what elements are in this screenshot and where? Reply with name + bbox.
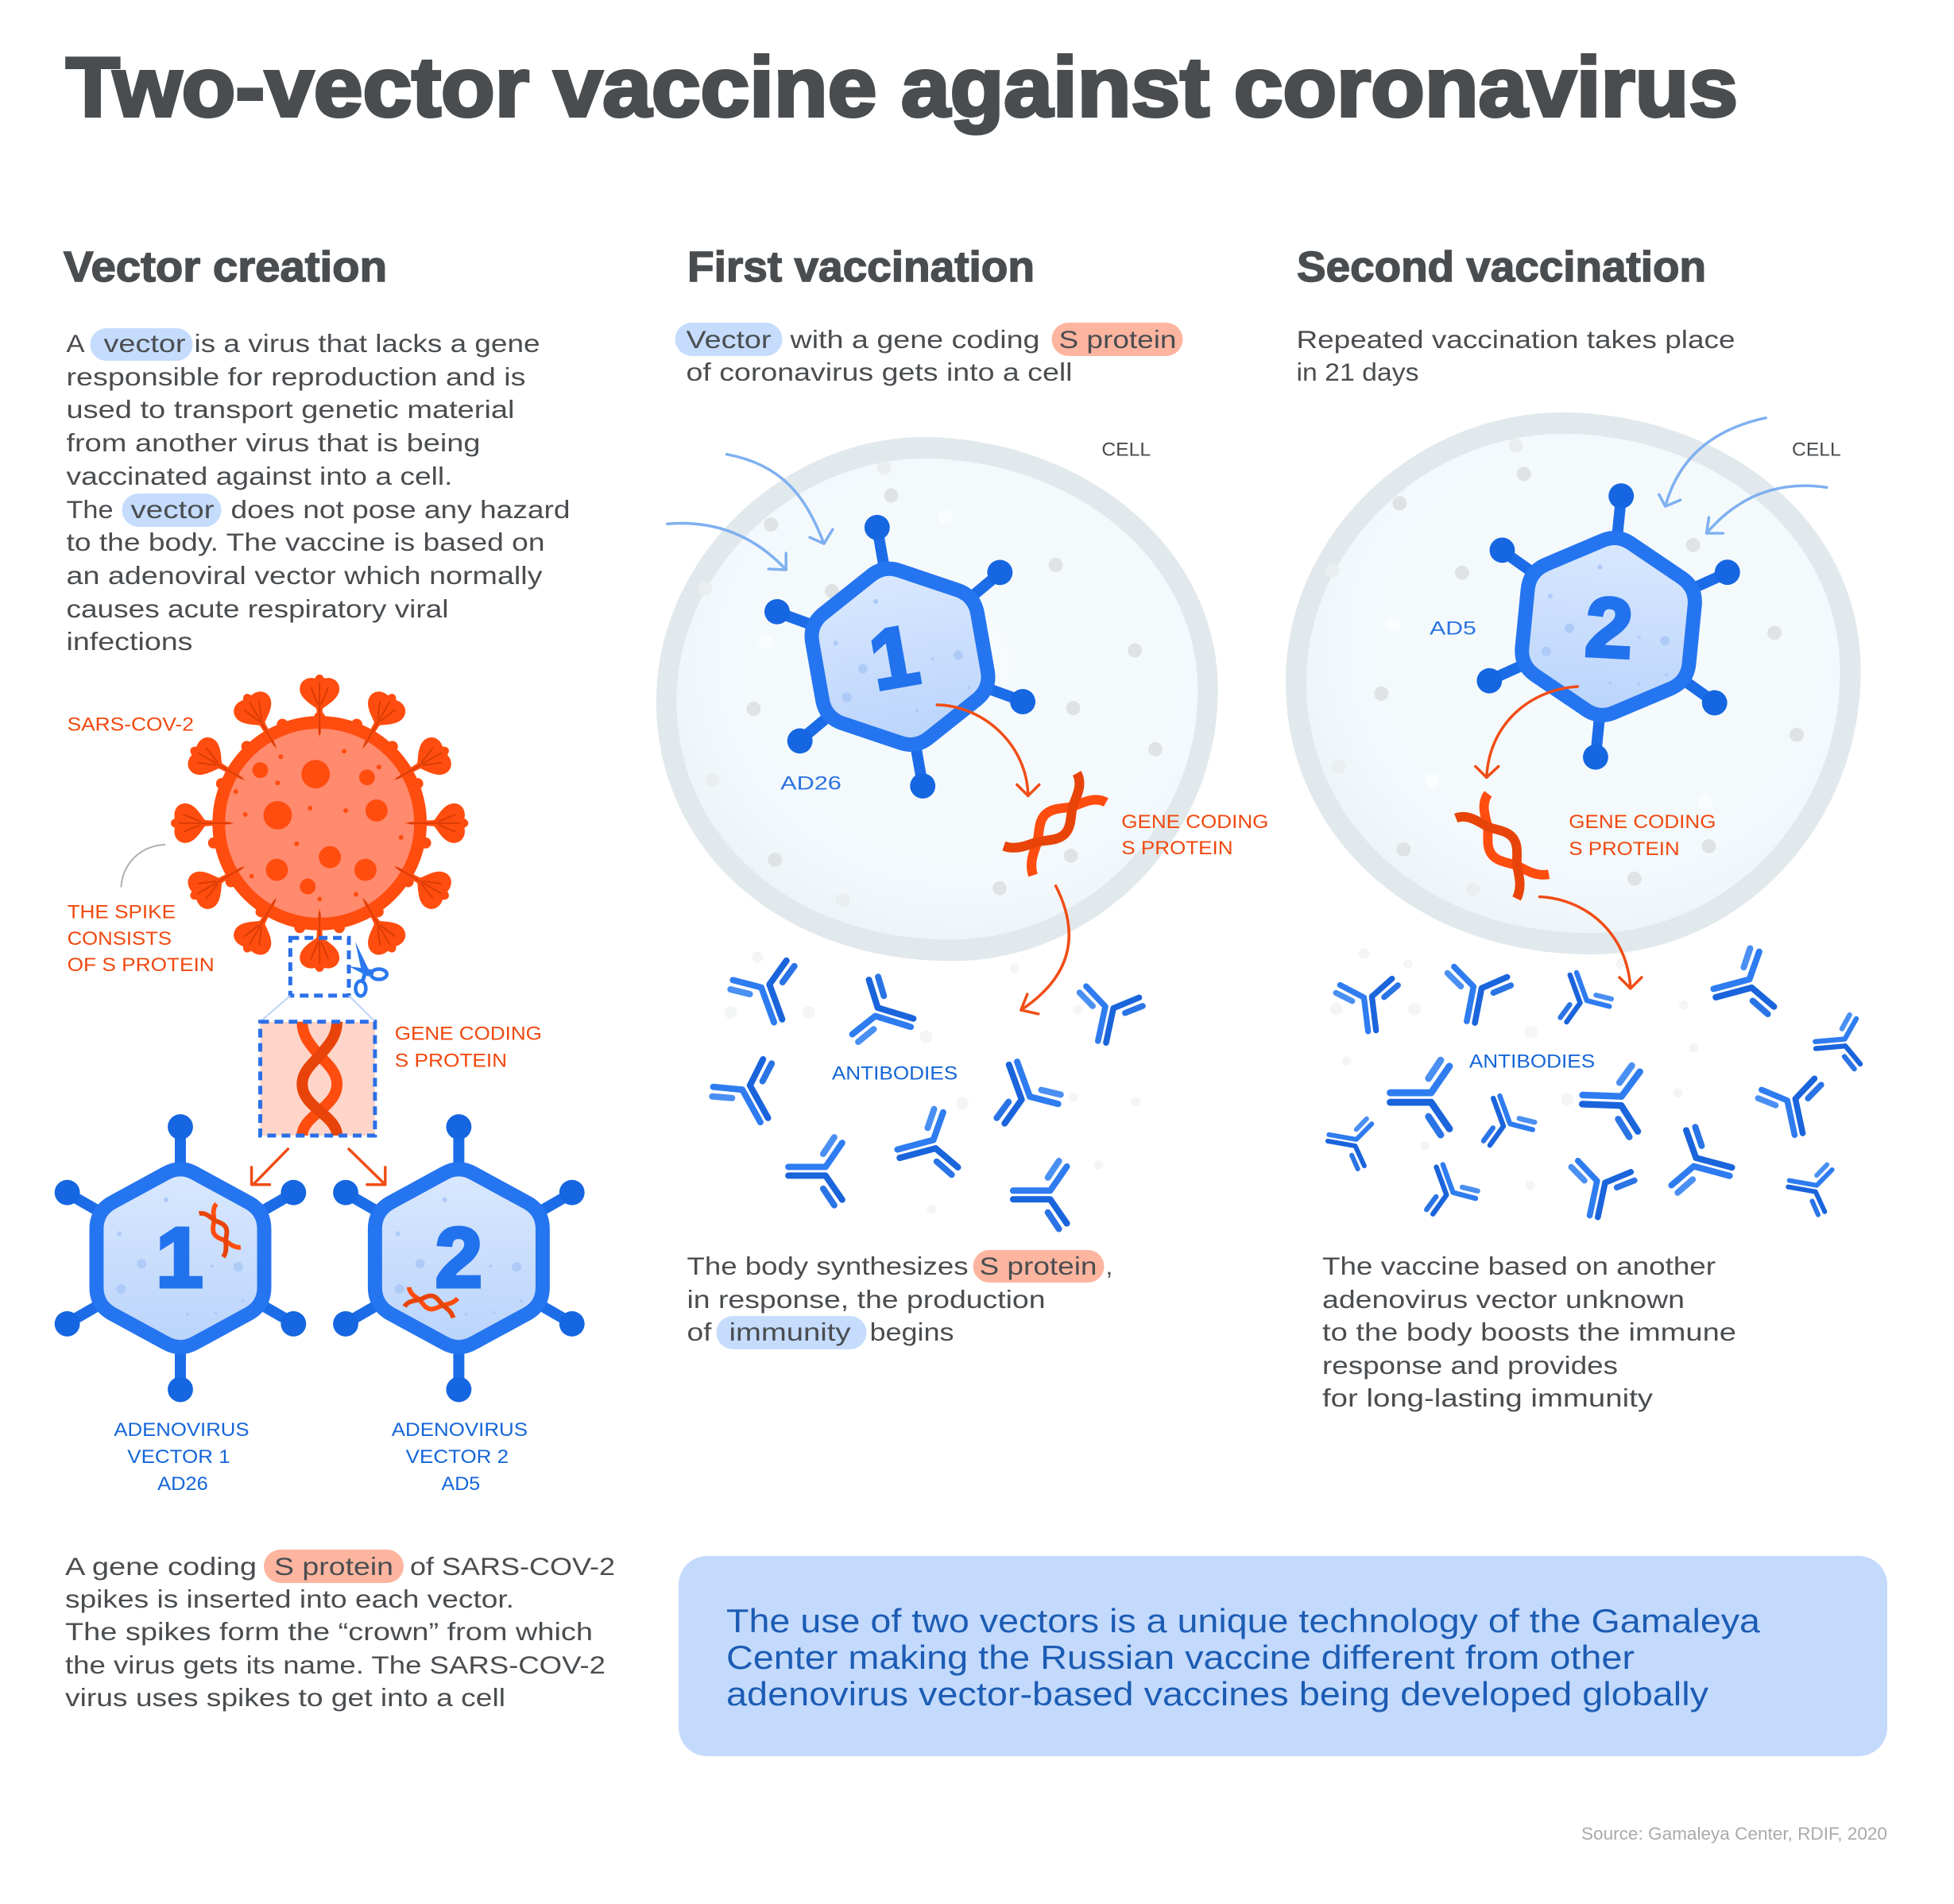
text block: vector definition: vaccinated against into a cell. xyxy=(67,462,453,490)
icon: SARS-COV-2 virus xyxy=(171,675,468,972)
arrow: vector to gene xyxy=(937,705,1039,795)
text block: S protein gene xyxy=(65,1550,615,1712)
text block: S protein gene: S protein xyxy=(274,1552,393,1581)
label: antibodies, second vaccination: ANTIBODIES xyxy=(1469,1051,1595,1072)
label: gene coding S protein: GENE CODING xyxy=(395,1024,542,1045)
panel: second vaccination cell xyxy=(1286,412,1861,954)
icon: DNA in first cell xyxy=(1004,773,1106,875)
text block: body response: of xyxy=(687,1318,712,1346)
label: adenovirus vector 1 AD26 xyxy=(114,1419,250,1495)
label: gene coding S protein, second cell: S PROTEIN xyxy=(1569,838,1680,860)
text block: second vaccination intro: Repeated vaccination takes place xyxy=(1297,325,1735,354)
text block: vector definition: responsible for reproduction and is xyxy=(67,362,526,391)
text block: S protein gene: virus uses spikes to get into a cell xyxy=(65,1683,505,1712)
text block: first vaccination intro xyxy=(675,323,1182,386)
label: adenovirus vector 2 AD5: VECTOR 2 xyxy=(406,1446,509,1468)
arrow: gene to antibodies xyxy=(1021,886,1069,1014)
text block: vector definition: from another virus that is being xyxy=(67,428,480,457)
text block: vector definition: infections xyxy=(67,627,192,656)
callout: The use of two vectors is a unique technology of the Gamaleya xyxy=(726,1602,1761,1639)
text block: vector definition: used to transport genetic material xyxy=(67,395,515,424)
icon: adenovirus vector 2 xyxy=(333,1114,585,1402)
panel: first vaccination diagram xyxy=(656,437,1268,1229)
callout xyxy=(679,1556,1887,1756)
callout: Center making the Russian vaccine different from other xyxy=(726,1639,1635,1676)
text block: S protein gene: spikes is inserted into each vector. xyxy=(65,1585,514,1613)
text block: first vaccination intro: with a gene coding xyxy=(789,325,1039,354)
arrow: vector entering cell, upper xyxy=(726,455,833,544)
icon: vector 1 in cell xyxy=(751,493,1049,820)
text block: first vaccination intro: of coronavirus gets into a cell xyxy=(687,358,1073,386)
text block: second vaccination result: The vaccine based on another xyxy=(1322,1252,1716,1280)
panel: vector creation diagram xyxy=(55,675,585,1495)
label: gene coding S protein, second cell: GENE CODING xyxy=(1569,811,1716,833)
label: gene coding S protein, first cell xyxy=(1121,811,1268,859)
callout: adenovirus vector-based vaccines being developed globally xyxy=(726,1675,1708,1712)
arrow: vector 2 to gene xyxy=(1476,687,1577,777)
icon: vector 2 in cell xyxy=(1469,471,1747,782)
text block: vector definition: causes acute respiratory viral xyxy=(67,594,448,623)
text block: first vaccination intro: S protein xyxy=(1058,325,1176,354)
text block: second vaccination result: response and provides xyxy=(1322,1351,1618,1380)
text block: vector definition: The xyxy=(67,495,113,524)
label: adenovirus vector 2 AD5 xyxy=(392,1419,528,1495)
text block: vector definition: is a virus that lacks a gene xyxy=(194,329,540,358)
title: Two-vector vaccine against coronavirus xyxy=(66,41,1738,134)
panel: second vaccination diagram xyxy=(1286,412,1861,1223)
heading: second vaccination: Second vaccination xyxy=(1297,243,1706,291)
dashed selection box on spike xyxy=(290,938,349,996)
source note: Source: Gamaleya Center, RDIF, 2020 xyxy=(1581,1824,1887,1844)
label: adenovirus vector 1 AD26: ADENOVIRUS xyxy=(114,1419,250,1441)
label: AD5: AD5 xyxy=(1430,617,1476,639)
text block: vector definition: does not pose any hazard xyxy=(230,495,571,524)
text block: first vaccination intro: Vector xyxy=(687,325,771,354)
callout line: spike xyxy=(121,845,165,888)
text block: S protein gene: the virus gets its name. The SARS-COV-2 xyxy=(65,1651,606,1679)
label: the spike consists of S protein xyxy=(68,901,215,976)
text block: vector definition: vector xyxy=(103,329,186,358)
text block: body response: S protein xyxy=(979,1252,1097,1280)
text block: body response: in response, the production xyxy=(687,1285,1046,1314)
panel: first vaccination cell xyxy=(656,437,1218,961)
zoom connector lines xyxy=(261,996,375,1022)
icon: scissors xyxy=(349,942,387,996)
icon: adenovirus vector 1 xyxy=(55,1114,306,1402)
label: adenovirus vector 2 AD5: AD5 xyxy=(441,1473,480,1495)
icon: adenovirus vector 1: 1 xyxy=(157,1211,203,1305)
text block: vector definition: vector xyxy=(130,495,215,524)
text block: second vaccination result xyxy=(1322,1252,1736,1412)
label: gene coding S protein: S PROTEIN xyxy=(395,1050,507,1071)
label: AD26: AD26 xyxy=(780,772,842,794)
faint dots: second vaccination antibodies xyxy=(1330,948,1699,1190)
text block: second vaccination intro: in 21 days xyxy=(1297,358,1419,386)
text block: second vaccination result: for long-lasting immunity xyxy=(1322,1383,1653,1412)
text block: vector definition: A xyxy=(67,329,84,358)
text block: body response: immunity xyxy=(729,1318,851,1346)
icon: vector 1 in cell: 1 xyxy=(863,609,925,708)
text block: second vaccination intro xyxy=(1297,325,1735,386)
text block: second vaccination result: adenovirus vector unknown xyxy=(1322,1285,1685,1314)
label: gene coding S protein, first cell: S PROTEIN xyxy=(1121,838,1233,859)
icon: DNA in second cell xyxy=(1456,794,1549,899)
label: antibodies, first vaccination: ANTIBODIES xyxy=(832,1063,958,1085)
arrow: vector entering cell, lower xyxy=(667,524,786,570)
arrow: gene to antibodies, second cell xyxy=(1539,897,1642,989)
gene fragment box with DNA xyxy=(261,1022,375,1136)
text block: vector definition xyxy=(67,328,571,656)
icon: vector 2 in cell: 2 xyxy=(1584,581,1635,676)
label: gene coding S protein, first cell: GENE CODING xyxy=(1121,811,1268,833)
icons: antibodies, second vaccination xyxy=(1324,946,1861,1223)
text block: body response: , xyxy=(1106,1252,1112,1280)
label: cell, second: CELL xyxy=(1792,439,1841,461)
text block: vector definition: to the body. The vaccine is based on xyxy=(67,528,545,556)
label: cell: CELL xyxy=(1101,439,1151,461)
label: the spike consists of S protein: CONSISTS xyxy=(68,928,172,950)
icon: adenovirus vector 2: 2 xyxy=(435,1211,482,1305)
label: the spike consists of S protein: THE SPIKE xyxy=(68,901,176,923)
text block: S protein gene: of SARS-COV-2 xyxy=(410,1552,615,1581)
arrow: to vector 1 xyxy=(252,1149,288,1185)
label: adenovirus vector 1 AD26: AD26 xyxy=(157,1473,208,1495)
arrow: to vector 2 xyxy=(349,1149,385,1185)
label: gene coding S protein xyxy=(395,1024,542,1071)
label: gene coding S protein, second cell xyxy=(1569,811,1716,860)
label: SARS-COV-2: SARS-COV-2 xyxy=(68,714,194,735)
label: adenovirus vector 2 AD5: ADENOVIRUS xyxy=(392,1419,528,1441)
heading: first vaccination: First vaccination xyxy=(687,243,1035,291)
heading: vector creation: Vector creation xyxy=(64,243,387,291)
text block: body response: The body synthesizes xyxy=(687,1252,968,1280)
text block: body response: begins xyxy=(869,1318,954,1346)
arrow: second vector entering, lower xyxy=(1707,486,1827,533)
text block: body response xyxy=(687,1250,1112,1349)
faint dots: first vaccination antibodies xyxy=(724,951,1140,1214)
label: the spike consists of S protein: OF S PROTEIN xyxy=(68,954,215,976)
icons: antibodies, first vaccination xyxy=(708,958,1144,1229)
text block: second vaccination result: to the body boosts the immune xyxy=(1322,1318,1736,1346)
arrow: second vector entering, upper xyxy=(1659,418,1766,506)
text block: S protein gene: A gene coding xyxy=(65,1552,257,1581)
text block: S protein gene: The spikes form the “crown” from which xyxy=(65,1617,593,1646)
label: adenovirus vector 1 AD26: VECTOR 1 xyxy=(127,1446,230,1468)
text block: vector definition: an adenoviral vector which normally xyxy=(67,561,543,590)
